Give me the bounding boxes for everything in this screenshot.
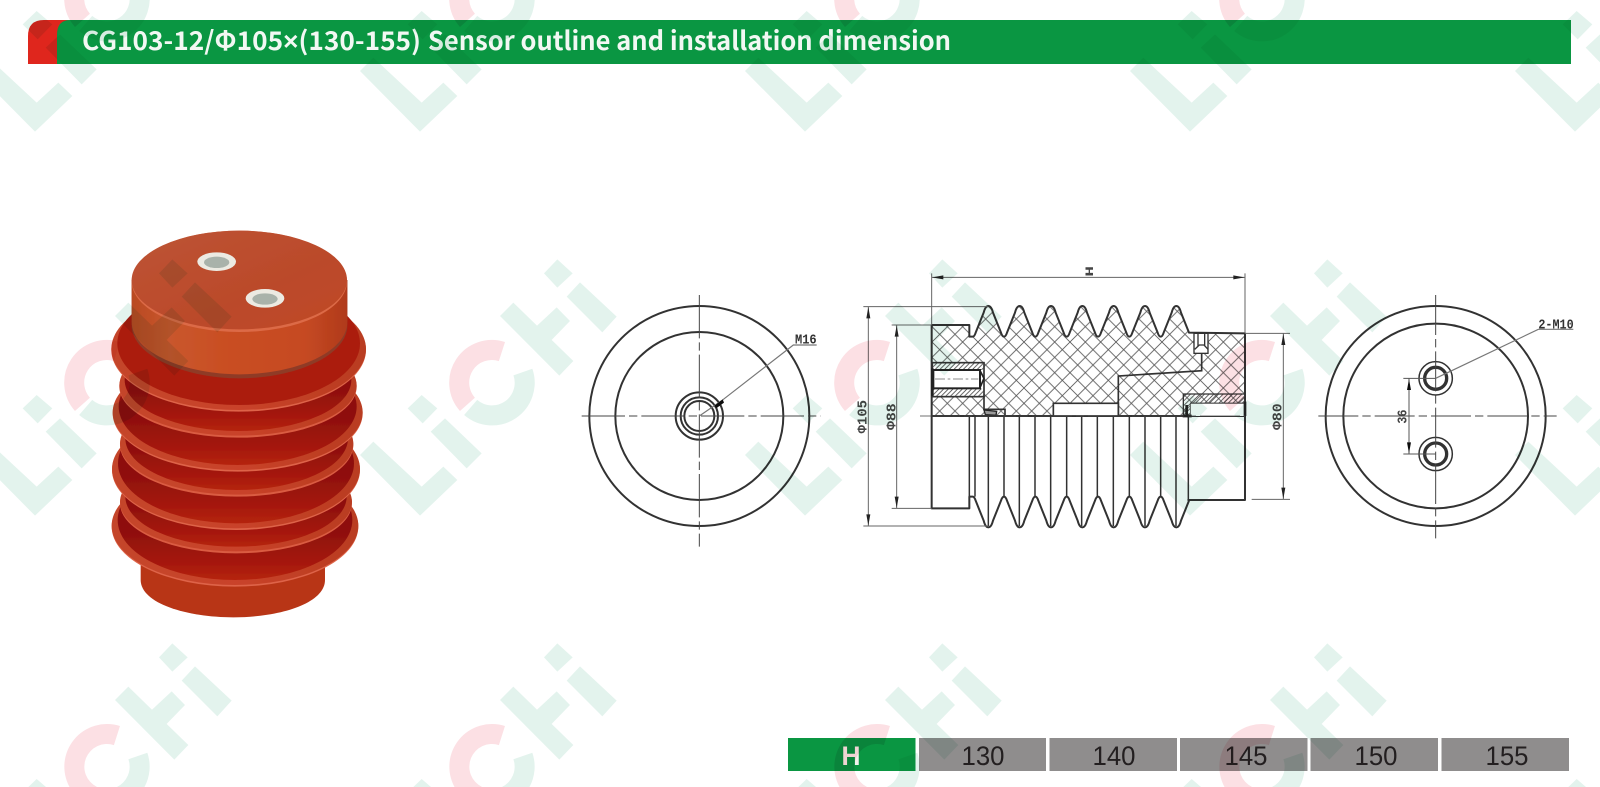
inner circle xyxy=(615,332,783,500)
cell 155: 155 xyxy=(1486,741,1528,771)
head cylinder xyxy=(132,231,347,378)
threaded insert 1 xyxy=(197,252,236,271)
fin 4 xyxy=(112,460,358,587)
cell 140 xyxy=(1050,738,1177,771)
cell 155 xyxy=(1442,738,1569,771)
small fitting xyxy=(984,410,997,415)
product photo: red epoxy sensor insulator xyxy=(111,231,366,617)
insert step line xyxy=(984,397,1005,416)
cell 150: 150 xyxy=(1354,741,1398,771)
centre lines xyxy=(1318,295,1557,538)
title xyxy=(82,21,951,58)
dimension 36 xyxy=(1396,378,1436,454)
label M16: M16 xyxy=(795,332,817,348)
fin 2 large xyxy=(113,348,363,472)
dimension H xyxy=(932,266,1245,333)
threaded insert 2 xyxy=(246,289,284,308)
central cavity xyxy=(1053,403,1118,416)
title: CG103-12/Φ105×(130-155) xyxy=(82,21,421,58)
fin vertical lines xyxy=(969,416,1188,526)
cell H xyxy=(788,738,916,771)
dimension table xyxy=(788,738,1569,771)
leader line xyxy=(699,345,817,416)
base cylinder xyxy=(141,563,325,617)
cell 130: 130 xyxy=(962,741,1004,771)
title: Sensor outline and installation dimension xyxy=(428,21,951,58)
side screw xyxy=(1194,333,1208,353)
cell 130 xyxy=(919,738,1046,771)
inner circle xyxy=(1343,324,1528,508)
lower half outline xyxy=(932,416,1245,527)
fin 2 small xyxy=(120,387,353,497)
dimension Φ80: Φ80 xyxy=(1271,403,1287,430)
leader line xyxy=(1436,329,1573,378)
outer circle xyxy=(589,306,809,526)
fin 3 small xyxy=(120,447,352,553)
leader arrowhead xyxy=(714,399,724,408)
M10 bolt hole xyxy=(932,363,984,397)
upper M10 hole xyxy=(1419,362,1452,395)
header red tab xyxy=(28,20,72,64)
hatched upper half xyxy=(932,306,1245,416)
cell 150 xyxy=(1310,738,1438,771)
rear view drawing: 2-M10 end xyxy=(1318,295,1574,538)
M16 threaded hole xyxy=(676,392,723,440)
fin 1 large xyxy=(111,282,366,412)
header bar xyxy=(28,20,1571,64)
dimension Φ105 xyxy=(855,307,988,526)
fin 3 large xyxy=(112,403,360,530)
dimension 36: 36 xyxy=(1396,410,1412,424)
front view drawing: M16 end xyxy=(582,295,821,547)
dimension H: H xyxy=(1082,266,1094,277)
dimension Φ80 xyxy=(1245,333,1290,499)
section view drawing xyxy=(855,266,1290,527)
lower M10 hole xyxy=(1419,437,1452,471)
cell 145: 145 xyxy=(1224,741,1268,771)
dimension Φ105: Φ105 xyxy=(855,400,871,433)
header green band xyxy=(57,20,1571,64)
right threaded recess xyxy=(1183,394,1245,416)
label 2-M10: 2-M10 xyxy=(1538,318,1574,334)
fin 1 small xyxy=(119,329,357,438)
cell 140: 140 xyxy=(1092,741,1136,771)
cell 145 xyxy=(1180,738,1308,771)
dimension Φ88 xyxy=(884,325,932,508)
cell H: H xyxy=(842,741,860,771)
dimension Φ88: Φ88 xyxy=(884,403,900,430)
M16 insert outline xyxy=(1118,354,1202,416)
centre lines xyxy=(582,295,821,547)
outer circle xyxy=(1326,306,1546,526)
section centre line xyxy=(920,415,1245,417)
